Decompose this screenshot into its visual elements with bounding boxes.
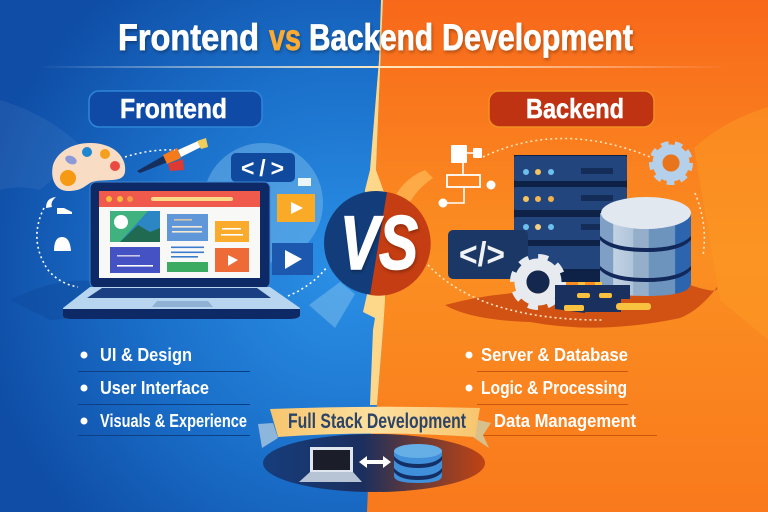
icon: code tag frontend [231,153,295,182]
icon: yellow play card [277,194,315,222]
heading: Frontend: Frontend [120,93,227,124]
code panel: </> [459,236,505,274]
heading: Frontend [89,91,262,127]
laptop base [63,287,300,319]
backend feature list: Server & Database [481,345,628,365]
code panel [448,230,528,279]
laptop [63,182,300,319]
screen cards [110,214,249,273]
VS badge [324,191,431,296]
browser title bar [99,191,260,207]
frontend feature list: User Interface [100,378,209,398]
VS badge: VS [340,201,418,286]
title: Frontend [118,17,259,58]
heading: Backend [489,91,654,127]
backend feature list: Logic & Processing [481,378,627,398]
icon: small chat [298,178,311,186]
icon: paint palette [52,143,125,191]
background: orange backend side [367,0,768,512]
database [600,197,691,296]
full stack ribbon: Full Stack Development [288,410,466,433]
white gear [513,257,563,307]
title: Development [442,17,633,58]
full stack ribbon [258,407,491,448]
icon: double arrow [359,456,391,468]
title: Backend [309,17,433,58]
full stack ellipse [263,434,485,492]
heading: Backend: Backend [526,93,624,124]
icon: small white shapes with dotted arc [37,197,327,296]
backend feature list [466,345,657,436]
frontend feature list [78,345,250,436]
icon: flowchart [438,138,650,208]
icon: paint brush [125,138,208,173]
dotted orbit backend [428,193,704,320]
title [118,17,633,58]
icon: blue play card [272,243,313,275]
circuit chip [555,282,651,313]
frontend feature list: Visuals & Experience [100,411,247,431]
icon: circle glow behind code [203,143,323,263]
icon: blue gear [652,144,690,182]
title: vs [269,17,301,58]
icon: mini database [394,444,442,483]
frontend feature list: UI & Design [100,345,192,365]
divider: yellow lightning seam [363,0,385,405]
icon: mini laptop [299,447,362,482]
backend feature list: Data Management [494,411,636,431]
background: blue frontend side [0,0,390,512]
ground shadow [445,285,717,328]
icon: code tag frontend: </> [241,155,284,181]
screen image card [110,211,160,242]
server rack [514,155,627,282]
